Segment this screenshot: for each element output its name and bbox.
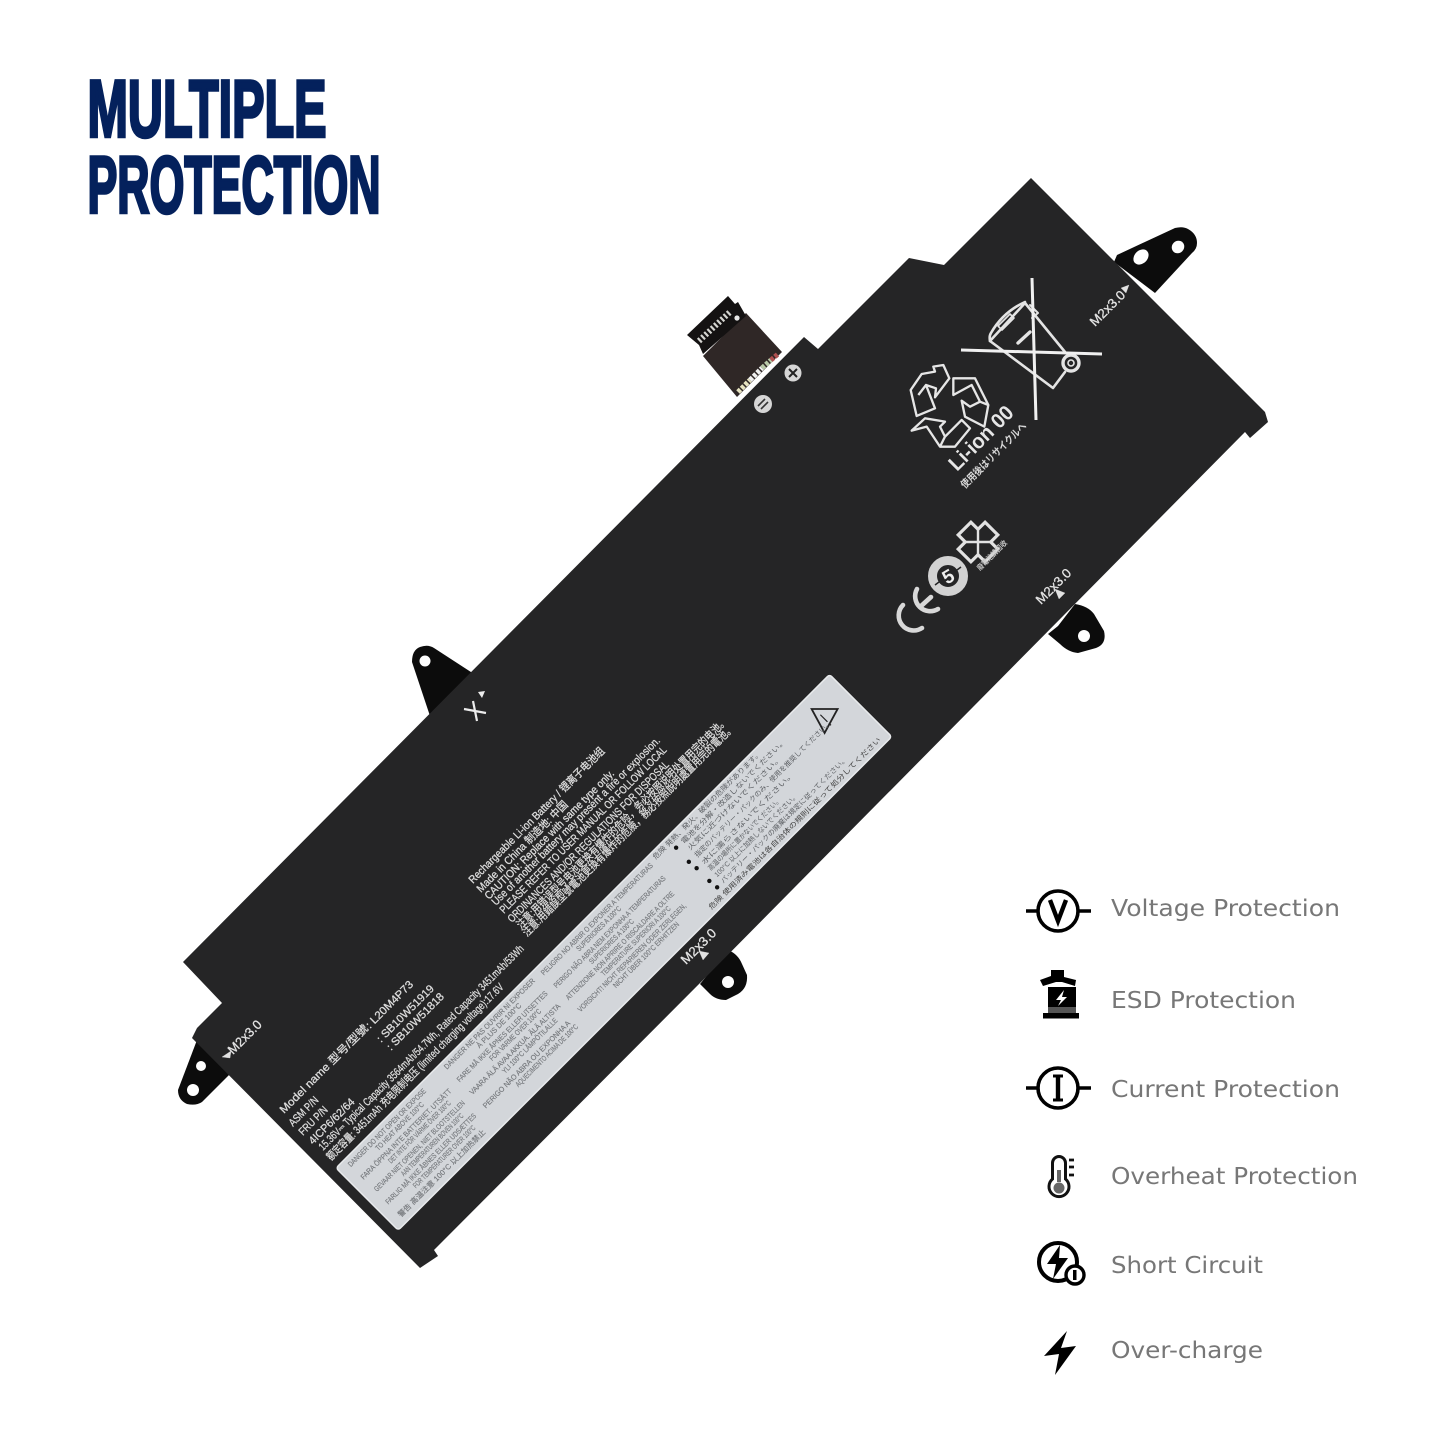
- title: MULTIPLE: [88, 64, 326, 154]
- voltage protection item: [1026, 891, 1340, 931]
- english warnings column 1: DET INTE FÖR VÄRME ÖVER 100°C: [386, 1098, 453, 1165]
- title: [88, 64, 380, 230]
- japanese warnings: 危険 発熱、発火、破裂の危険があります。: [651, 749, 763, 861]
- model text block: ASM P/N: [287, 1094, 321, 1129]
- english warnings column 2: FOR VARME OVER 100°C: [487, 1006, 543, 1063]
- english warnings column 3: VORSICHT! NICHT REPARIEREN ODER ZERLEGEN,: [576, 901, 688, 1014]
- ce mark: [899, 589, 938, 630]
- english warnings column 1: FOR TEMPERATURER OVER 100°C: [411, 1123, 478, 1190]
- screw labels: M2x3.0: [678, 925, 719, 967]
- title: PROTECTION: [88, 140, 380, 230]
- safety text block: Rechargeable Li-ion Battery / 锂离子电池组: [465, 744, 607, 886]
- safety text block: ORDINANCES AND/OR REGULATIONS FOR DISPOSAL: [506, 759, 672, 925]
- english warnings column 3: ATTENZIONE NON APRIRE O RISCALDARE A OLTRE: [564, 889, 676, 1002]
- model text block: [276, 943, 527, 1163]
- japanese warnings: 100°C 以上に加熱しないでください。: [712, 791, 800, 879]
- overheat protection item: Overheat Protection: [1111, 1162, 1358, 1190]
- safety text block: Use of another battery may present a fire or explosion.: [490, 735, 663, 908]
- short circuit item: [1039, 1243, 1263, 1284]
- english warnings column 2: FARE MÅ IKKE ÅPNES ELLER UTSETTES: [455, 989, 550, 1084]
- english warnings column 3: PERIGO NÃO ABRA NEM EXPONHA A TEMPERATURAS: [552, 874, 668, 990]
- overheat protection item: [1049, 1156, 1358, 1197]
- li-ion text: Li-ion 00: [944, 401, 1019, 476]
- japanese warnings: 指定のバッテリー・パックのみ、使用を推奨してください。: [692, 718, 833, 859]
- model text block: : SB10W51818: [385, 991, 447, 1053]
- esd protection item: ESD Protection: [1111, 986, 1296, 1014]
- current protection item: Current Protection: [1111, 1075, 1340, 1103]
- english warnings column 1: FARA ÖPPNA INTE BATTERIET. UTSÄTT: [359, 1086, 454, 1181]
- english warnings column 1: GEVAAR NIET OPENEN, NIET BLOOTSTELLEN: [372, 1099, 467, 1193]
- x mark: [464, 691, 486, 721]
- screw labels: M2x3.0: [1033, 565, 1074, 607]
- japanese warnings: バッテリー・パックの廃棄は規定に従ってください。: [719, 754, 849, 885]
- polarity marks: [754, 364, 802, 413]
- english warnings column 3: TEMPERATURE SUPERIORI A 100°C: [599, 904, 673, 978]
- over-charge item: [1044, 1331, 1263, 1375]
- english warnings column 2: DANGER NE PAS OUVRIR NI EXPOSER: [442, 976, 537, 1071]
- esd protection item: [1040, 970, 1296, 1018]
- japanese warnings: 水に濡らさないでください。: [699, 769, 796, 866]
- model text block: : L20M4P73: [364, 979, 416, 1031]
- over-charge item: Over-charge: [1111, 1336, 1263, 1364]
- crossed bin symbol: [961, 278, 1102, 420]
- english warnings column 2: PERIGO NÃO ABRA OU EXPONHA A: [481, 1019, 572, 1110]
- model text block: FRU P/N: [297, 1104, 331, 1138]
- safety text block: Made in China 制造地: 中国: [473, 798, 571, 895]
- warning triangle: [800, 696, 850, 746]
- safety text block: 注意:用錯誤型號電池更換有爆炸的危險，務必按照說明處置用完的電池。: [519, 721, 737, 939]
- model text block: 4ICP6/62/64: [307, 1096, 358, 1147]
- warning label: [336, 674, 892, 1230]
- battery illustration: [178, 178, 1268, 1268]
- safety text block: PLEASE REFER TO USER MANUAL OR FOLLOW LOCAL: [498, 744, 669, 916]
- recycling symbol: [911, 365, 988, 447]
- japanese warnings: 電池を分解・改造しないでください。: [679, 737, 788, 846]
- tab holes: [187, 238, 1187, 1096]
- english warnings column 2: YLI 100°C LÄMPÖTILALLE: [500, 1016, 559, 1075]
- taiwan recycle mark: [951, 515, 1009, 572]
- english warnings column 1: DANGER DO NOT OPEN OR EXPOSE: [346, 1087, 428, 1169]
- english warnings column 2: À PLUS DE 100°C: [475, 1001, 524, 1050]
- english warnings column 1: FARLIG MÅ IKKE ÅBNES ELLER UDSÆTTES: [383, 1111, 478, 1206]
- protection list: [1026, 891, 1358, 1375]
- recycle 5 mark: [932, 560, 964, 592]
- label plate: [336, 674, 892, 1230]
- japanese warnings: 火気に近づけないでください。: [685, 754, 784, 852]
- english warnings column 3: SUPERIORES A 100°C: [574, 904, 623, 953]
- voltage protection item: Voltage Protection: [1111, 894, 1340, 922]
- japanese warnings: [651, 682, 883, 914]
- safety text block: 注意:用错误型号电池更换有爆炸的危险，务必按照说明处置用完的电池。: [513, 714, 730, 931]
- screw labels: [222, 285, 1129, 1058]
- recycle note: 使用後はリサイクルへ: [958, 419, 1030, 491]
- japanese warnings: 危険 使用済み電池は各自治体の規則に従って処分してください: [707, 735, 883, 911]
- model text block: 额定容量: 3451mAh 充电限制电压 (limited charging voltage):17.6V: [323, 980, 507, 1163]
- english warnings column 2: [442, 976, 582, 1116]
- english warnings column 1: [346, 1073, 492, 1219]
- safety text block: CAUTION: Replace with same type only.: [483, 768, 617, 902]
- english warnings column 1: TO HEAT ABOVE 100°C: [373, 1100, 426, 1152]
- mounting tabs: [178, 227, 1197, 1105]
- screw labels: M2x3.0: [225, 1017, 265, 1057]
- current protection item: [1026, 1068, 1340, 1108]
- english warnings column 3: PELIGRO NO ABRIR O EXPONER A TEMPERATURAS: [539, 861, 655, 977]
- flex connector: [687, 296, 782, 397]
- english warnings column 1: AAN TEMPERATUREN BOVEN 100°C: [399, 1111, 466, 1178]
- short circuit item: Short Circuit: [1111, 1251, 1263, 1279]
- japanese warnings: 高温の場所に置かないでください。: [706, 795, 783, 872]
- english warnings column 3: NICHT ÜBER 100°C ERHITZEN: [611, 920, 681, 990]
- bullet dots: [672, 844, 720, 892]
- taiwan recycle mark: 廢電池請回收: [974, 537, 1009, 572]
- english warnings column 2: VAARA ÄLÄ AVAA AKKUA. ÄLÄ ALTISTA: [468, 1002, 562, 1097]
- model text block: : SB10W51919: [375, 983, 437, 1045]
- model text block: Model name 型号/型號: [276, 1021, 371, 1116]
- english warnings column 3: SUPERIORES A 100°C: [587, 917, 636, 966]
- english warnings column 2: AQUECIMENTO ACIMA DE 100°C: [513, 1022, 580, 1089]
- recycle 5 mark: 5: [939, 565, 959, 589]
- battery body: [183, 178, 1268, 1268]
- english warnings column 1: 警告 高温注意 100°C 以上加热禁止: [395, 1127, 488, 1219]
- screw labels: M2x3.0: [1087, 287, 1128, 329]
- model text block: 15.36V⎓ Typical Capacity 3564mAh/54.7Wh, Rated Capacity 3451mAh/53Wh: [317, 943, 527, 1153]
